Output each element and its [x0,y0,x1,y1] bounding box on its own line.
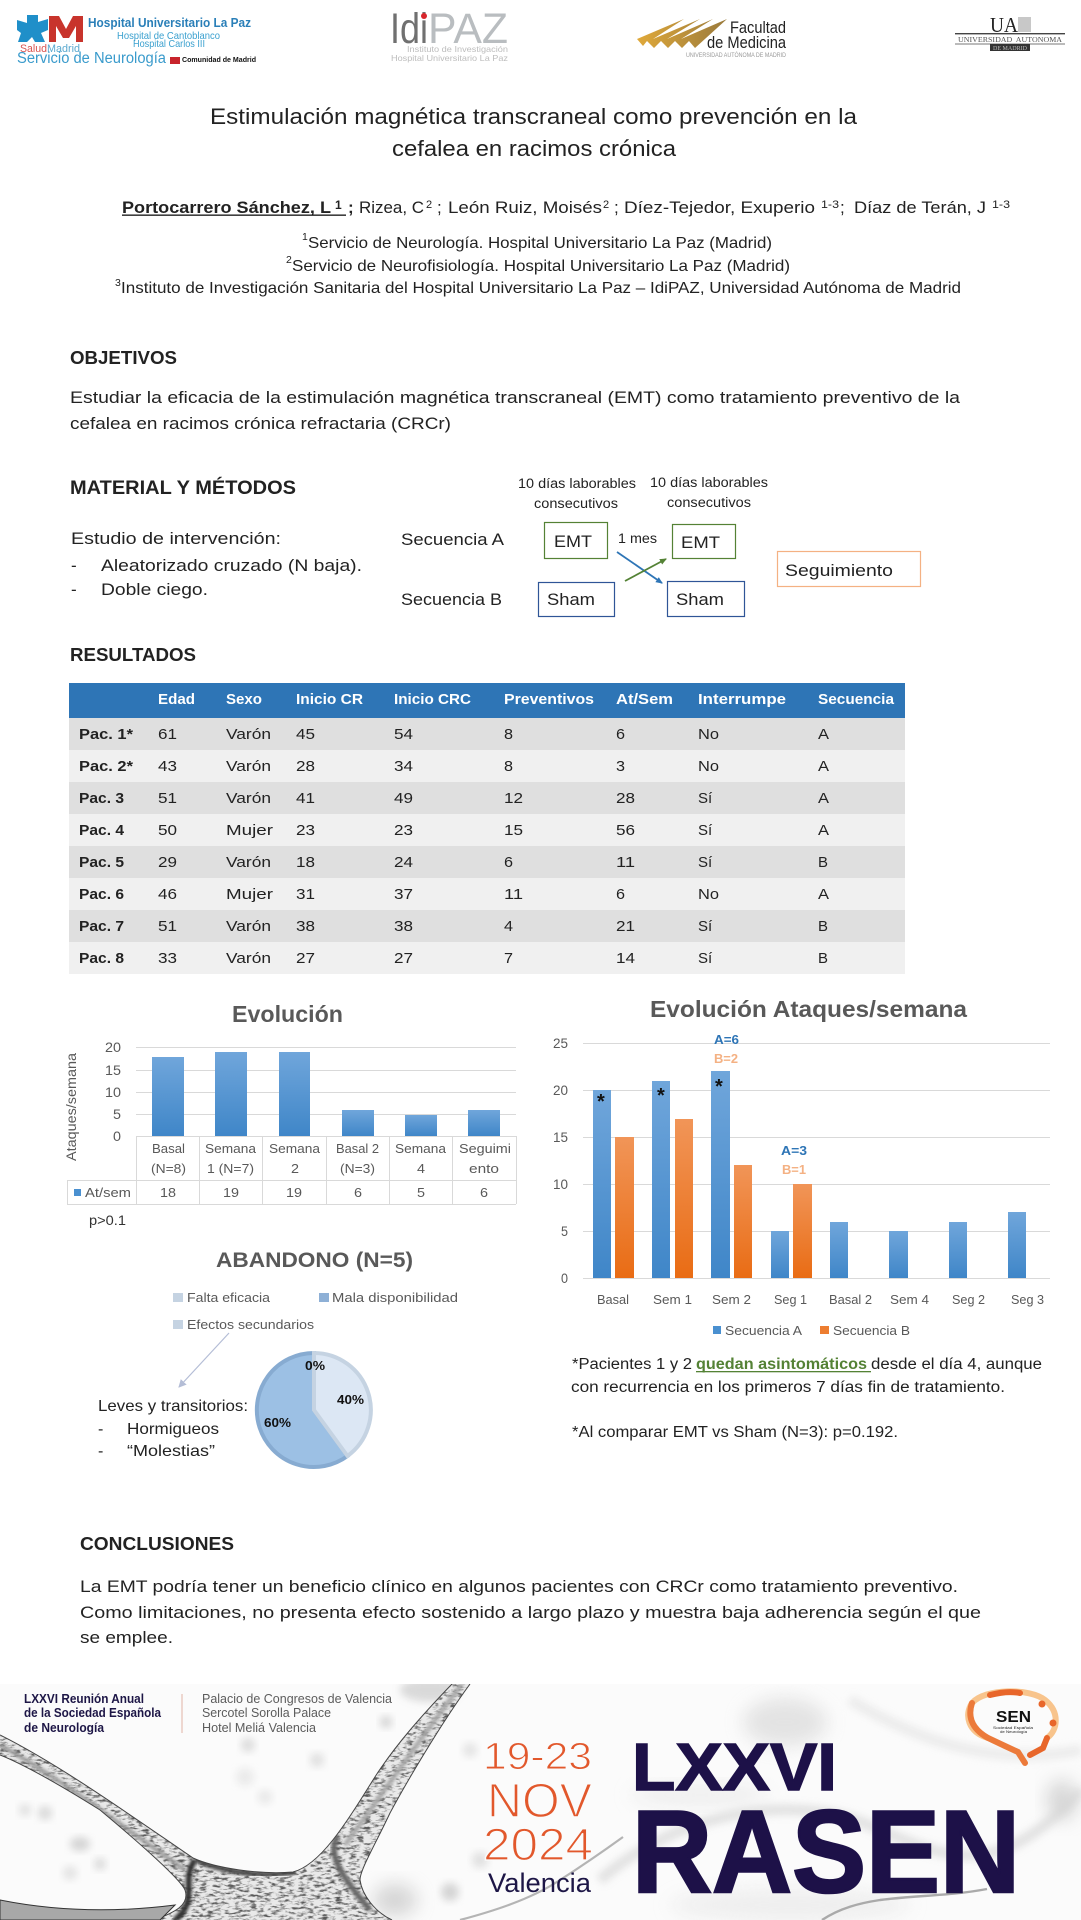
label: 10 días laborables primera fase [518,476,636,511]
logo: Universidad Autónoma de Madrid: DE MADRID [993,46,1028,52]
authors: 2 [426,199,432,211]
logo: Facultad de Medicina: Facultad [730,18,786,37]
text: comparación EMT vs Sham: *Al comparar EMT vs Sham (N=3): p=0.192. [572,1424,898,1441]
legend [173,1291,458,1332]
logo: Hospital Universitario La Paz: Hospital de Cantoblanco [117,30,220,42]
y axis labels [553,1035,568,1286]
icon: gold stripes [637,19,727,48]
row: Pac. 2: No [698,758,719,775]
bars: secuencia B [615,1119,812,1278]
box: EMT fase 2: EMT [681,533,720,552]
table: pacientes [69,683,905,974]
data table: ento [469,1162,499,1176]
logo: Universidad Autónoma de Madrid: UNIVERSIDAD AUTONOMA [958,35,1063,44]
legend: Secuencia A [725,1323,802,1338]
logo: IdiPAZ: PAZ [428,5,508,53]
row: Pac. 3: 51 [158,790,177,807]
affiliations: 1 [302,231,308,243]
box: EMT fase 1 [544,522,608,558]
data table: 6 [354,1186,362,1200]
logo: SEN: de Neurología [1000,1729,1028,1734]
row: Pac. 3: 28 [616,790,635,807]
icon: red M [49,16,83,42]
y axis labels: 10 [105,1084,121,1100]
arrow: blue crossover [617,552,662,583]
icon: SaludMadrid cross [17,15,48,42]
x axis labels: Seg 1 [774,1292,807,1307]
row: Pac. 3: 41 [296,790,315,807]
box: Sham fase 2: Sham [676,590,724,609]
row: Pac. 4: 56 [616,822,635,839]
row: Pac. 2: A [818,758,829,775]
row: Pac. 5: Pac. 5 [79,855,124,871]
affiliations: Servicio de Neurofisiología. Hospital Universitario La Paz (Madrid) [292,258,790,275]
table header: Secuencia [818,692,895,708]
asterisks on bars: * [597,1091,605,1113]
annotation: Sem 2 n: B=2 [714,1051,738,1066]
data table: At/sem [85,1186,131,1200]
chart title: Evolución Ataques/semana [650,996,967,1022]
row: Pac. 1: 54 [394,726,413,743]
arrow: green crossover [625,559,666,581]
row: Pac. 4: Mujer [226,822,273,839]
row: Pac. 6: A [818,886,829,903]
row: Pac. 8: B [818,950,828,967]
row: Pac. 4: Sí [698,822,713,839]
data table: 4 [417,1162,425,1176]
text: objetivos: cefalea en racimos crónica refractaria (CRCr) [70,414,451,433]
affiliations: 3 [115,277,121,289]
logo: Facultad de Medicina: de Medicina [707,33,786,52]
text: conclusiones: La EMT podría tener un beneficio clínico en algunos pacientes con CRCr como tratamiento preventivo. [80,1577,958,1596]
data table: Seguimi [459,1142,511,1156]
chart title: ABANDONO (N=5) [216,1249,413,1272]
row: Pac. 4: 23 [394,822,413,839]
label: 10 días laborables segunda fase [650,475,768,510]
axons [460,1837,987,1920]
affiliations: Servicio de Neurología. Hospital Universitario La Paz (Madrid) [308,235,772,252]
box: Sham fase 1: Sham [547,590,595,609]
y axis labels: 25 [553,1035,568,1051]
row: Pac. 5: 11 [616,854,635,871]
data table: 1 (N=7) [207,1162,254,1176]
row: Pac. 6: 46 [158,886,177,903]
row: Pac. 5: Varón [226,854,271,871]
text: nota pacientes asintomáticos: desde el día 4, aunque [871,1356,1042,1373]
row: Pac. 5 [69,846,905,878]
row: Pac. 7: 4 [504,918,513,935]
logo: SEN: SEN [996,1709,1031,1726]
legend: Secuencia B [833,1323,910,1338]
row: Pac. 2: Pac. 2* [79,759,133,775]
text: estudio de intervención: Doble ciego. [101,580,208,599]
annotation: Sem 2 n [714,1032,739,1066]
dates: NOV [487,1775,592,1828]
text: estudio de intervención: - [71,556,77,575]
row: Pac. 1: 45 [296,726,315,743]
pie labels: 40% [337,1392,364,1407]
authors: ; [348,198,354,217]
heading: objetivos: OBJETIVOS [70,348,177,368]
row: Pac. 3: Varón [226,790,271,807]
authors: Díaz de Terán, J [854,198,986,217]
meeting name: de Neurología [24,1721,105,1735]
asterisks on bars [597,1076,723,1113]
row: Pac. 7: 21 [616,918,635,935]
authors: 2 [603,199,609,211]
text: leves y transitorios: Leves y transitorios: [98,1398,248,1415]
dates: 2024 [483,1819,593,1870]
y axis labels: 15 [553,1129,568,1145]
legend: Efectos secundarios [187,1318,314,1332]
text: nota pacientes asintomáticos: con recurrencia en los primeros 7 días fin de tratamiento. [571,1379,1005,1396]
row: Pac. 1: Varón [226,726,271,743]
text: leves y transitorios: “Molestias” [127,1443,215,1460]
meeting name [24,1692,162,1735]
row: Pac. 4: 50 [158,822,177,839]
logo: IdiPAZ: Hospital Universitario La Paz [391,53,508,63]
box: seguimiento [778,552,920,586]
row: Pac. 3: A [818,790,829,807]
logo: Hospital Universitario La Paz: Madrid [47,43,80,55]
row: Pac. 1: A [818,726,829,743]
row: Pac. 1: No [698,726,719,743]
pie slices [257,1353,371,1467]
data table: 2 [291,1162,299,1176]
row: Pac. 7: 51 [158,918,177,935]
text: leves y transitorios: - [98,1421,103,1438]
x axis labels: Sem 4 [890,1292,929,1307]
meeting name: de la Sociedad Española [24,1706,162,1720]
row: Pac. 8: Pac. 8 [79,951,124,967]
authors: 1 [335,198,342,212]
data table: 19 [223,1186,239,1200]
row: Pac. 5: 18 [296,854,315,871]
title: cefalea en racimos crónica [392,136,677,161]
y axis labels: 15 [105,1062,121,1078]
pie labels: 0% [305,1358,325,1373]
row: Pac. 5: B [818,854,828,871]
row: Pac. 6: No [698,886,719,903]
label: 10 días laborables primera fase: 10 días laborables [518,476,636,491]
logo: Hospital Universitario La Paz [17,15,256,67]
table header: Edad [158,692,195,708]
text: conclusiones: se emplee. [80,1628,173,1647]
banner: LXXVI RASEN [0,1678,1081,1920]
asterisks on bars: * [657,1085,665,1107]
data table: Semana [269,1142,320,1156]
dates: 19-23 [483,1736,592,1778]
title: Estimulación magnética transcraneal como prevención en la [210,104,858,129]
text: estudio de intervención [71,529,362,599]
text: estudio de intervención: - [71,580,77,599]
logo: IdiPAZ [390,5,508,63]
table header: Sexo [226,692,262,708]
row: Pac. 6: 31 [296,886,315,903]
affiliations: 2 [286,254,292,266]
diagram: crossover design [401,475,920,616]
row: Pac. 4: A [818,822,829,839]
row: Pac. 2: 28 [296,758,315,775]
logo: Facultad de Medicina: UNIVERSIDAD AUTÓNOMA DE MADRID [686,50,786,59]
text: nota pacientes asintomáticos [571,1356,1042,1396]
text: leves y transitorios: Hormigueos [127,1421,219,1438]
authors: León Ruiz, Moisés [448,198,602,217]
row: Pac. 1: 6 [616,726,625,743]
row: Pac. 2: 34 [394,758,413,775]
chart title: Evolución [232,1001,343,1027]
annotation: Seg 1 n: A=3 [781,1143,807,1158]
table header: Inicio CRC [394,692,472,708]
logo: SEN: Sociedad Española [993,1725,1034,1730]
row: Pac. 3: 12 [504,790,523,807]
row: Pac. 5: 24 [394,854,413,871]
y axis labels: 20 [553,1082,568,1098]
row: Pac. 6: 37 [394,886,413,903]
row: Pac. 8: Varón [226,950,271,967]
annotation: Sem 2 n: A=6 [714,1032,739,1047]
row: Pac. 8: 27 [296,950,315,967]
y axis labels: 5 [113,1106,121,1122]
text: leves y transitorios [98,1398,248,1460]
logo: SEN [968,1691,1056,1763]
text: estudio de intervención: Estudio de intervención: [71,529,281,548]
pie labels: 60% [264,1415,291,1430]
row: Pac. 7: B [818,918,828,935]
row: Pac. 6: Mujer [226,886,273,903]
y axis labels [105,1039,121,1144]
logo: Universidad Autónoma de Madrid: UA [990,13,1019,37]
text: leves y transitorios: - [98,1443,103,1460]
row: Pac. 2 [69,750,905,782]
data table: (N=3) [340,1162,375,1176]
data table: Basal 2 [336,1142,379,1156]
annotation: Seg 1 n [781,1143,807,1177]
label: 10 días laborables segunda fase: consecutivos [667,495,751,510]
x axis labels: Sem 2 [712,1292,751,1307]
venues [202,1694,392,1732]
legend: Falta eficacia [187,1291,270,1305]
meeting name: LXXVI Reunión Anual [24,1692,144,1706]
row: Pac. 3: Sí [698,790,713,807]
authors: ; [840,198,845,217]
logo: Universidad Autónoma de Madrid [955,13,1065,52]
row: Pac. 2: 3 [616,758,625,775]
data table: 5 [417,1186,425,1200]
row: Pac. 6: Pac. 6 [79,887,124,903]
row: Pac. 2: 43 [158,758,177,775]
row: Pac. 1 [69,718,905,750]
text: nota pacientes asintomáticos: *Pacientes 1 y 2 [572,1356,692,1373]
row: Pac. 6: 11 [504,886,523,903]
venues: Palacio de Congresos de Valencia [202,1692,392,1706]
data table: 6 [480,1186,488,1200]
row: Pac. 3 [69,782,905,814]
text: estudio de intervención: Aleatorizado cruzado (N baja). [101,556,362,575]
text: objetivos: Estudiar la eficacia de la estimulación magnética transcraneal (EMT) como tratamiento preventivo de la [70,388,961,407]
bars: secuencia A [593,1071,1026,1278]
neuron body and dendrites [0,1684,480,1920]
box: EMT fase 1: EMT [554,532,592,551]
y axis labels: 0 [561,1270,568,1286]
row: Pac. 2: Varón [226,758,271,775]
row: Pac. 1: 8 [504,726,513,743]
box: Sham fase 2 [668,582,744,616]
heading: conclusiones: CONCLUSIONES [80,1533,234,1554]
authors: 1-3 [821,199,839,211]
authors [122,198,1010,217]
data table: 18 [160,1186,176,1200]
note: p>0.1: p>0.1 [89,1213,126,1228]
dates [484,1743,591,1892]
logo: IdiPAZ: Instituto de Investigación [407,44,508,54]
box: EMT fase 2 [672,524,736,558]
asterisks on bars: * [715,1076,723,1098]
box: seguimiento: Seguimiento [785,561,893,580]
bars [152,1052,500,1136]
row: Pac. 7 [69,910,905,942]
row: Pac. 4: 15 [504,822,523,839]
logo: Hospital Universitario La Paz: Hospital Universitario La Paz [88,15,251,30]
row: Pac. 8: Sí [698,950,713,967]
authors: Portocarrero Sánchez, L [122,198,331,217]
venues: Hotel Meliá Valencia [202,1721,316,1735]
authors: Rizea, C [359,198,424,217]
title [210,104,858,161]
row: Pac. 1: 61 [158,726,177,743]
arrow: efectos secundarios to note [179,1333,229,1387]
logo: Hospital Universitario La Paz: Servicio de Neurología [17,50,166,67]
annotation: Seg 1 n: B=1 [782,1162,806,1177]
x axis labels: Basal [597,1292,629,1307]
label: 10 días laborables primera fase: consecutivos [534,496,618,511]
row: Pac. 7: Sí [698,918,713,935]
row: Pac. 8: 7 [504,950,513,967]
affiliations [115,231,961,297]
x axis labels: Sem 1 [653,1292,692,1307]
bar chart: Evolución [64,1001,516,1204]
row: Pac. 5: 6 [504,854,513,871]
table header: At/Sem [616,692,673,708]
row: Pac. 8: 33 [158,950,177,967]
row: Pac. 7: 38 [394,918,413,935]
logo: Hospital Universitario La Paz: Hospital Carlos III [133,38,205,50]
x axis labels: Seg 2 [952,1292,985,1307]
row: Pac. 7: Varón [226,918,271,935]
box: Sham fase 1 [538,582,614,616]
row: Pac. 5: 29 [158,854,177,871]
text: objetivos [70,388,961,433]
authors: 1-3 [992,199,1010,211]
row: Pac. 6: 6 [616,886,625,903]
heading: material y métodos: MATERIAL Y MÉTODOS [70,477,296,499]
row: Pac. 8: 27 [394,950,413,967]
text: conclusiones: Como limitaciones, no presenta efecto sostenido a largo plazo y muestra baja adherencia según el que [80,1603,981,1622]
data table: (N=8) [151,1162,186,1176]
venues: Sercotel Sorolla Palace [202,1706,331,1720]
row: Pac. 4 [69,814,905,846]
label: 1 mes: 1 mes [618,531,657,546]
row: Pac. 3: Pac. 3 [79,791,124,807]
y axis title: Ataques/semana [64,1052,79,1161]
table header: Preventivos [504,692,594,708]
row: Pac. 1: Pac. 1* [79,727,133,743]
heading: resultados: RESULTADOS [70,645,196,665]
pie chart: Abandono [173,1249,458,1467]
row: Pac. 6 [69,878,905,910]
logo: IdiPAZ: Idi [390,5,428,53]
pie labels [264,1358,364,1430]
data table [67,1136,516,1204]
authors: ; [614,198,619,217]
row: Pac. 3: 49 [394,790,413,807]
heading: RASEN: RASEN [632,1786,1020,1917]
row: Pac. 8: 14 [616,950,635,967]
data table: 19 [286,1186,302,1200]
logo: Hospital Universitario La Paz: Salud [20,43,47,55]
authors: Díez-Tejedor, Exuperio [624,198,815,217]
label: secuencia A: Secuencia A [401,530,505,549]
x axis labels [597,1292,1044,1307]
row: Pac. 5: Sí [698,854,713,871]
y axis labels: 0 [113,1128,121,1144]
row: Pac. 7: 38 [296,918,315,935]
table header [69,683,905,718]
x axis labels: Basal 2 [829,1292,872,1307]
dates: Valencia [488,1868,592,1898]
y axis labels: 20 [105,1039,121,1055]
y axis labels: 5 [561,1223,568,1239]
x axis labels: Seg 3 [1011,1292,1044,1307]
row: Pac. 7: Pac. 7 [79,919,124,935]
heading: LXXVI: LXXVI [632,1730,837,1805]
affiliations: Instituto de Investigación Sanitaria del Hospital Universitario La Paz – IdiPAZ, Universidad Autónoma de Madrid [121,280,961,297]
data table: Semana [205,1142,256,1156]
table header: Inicio CR [296,692,364,708]
text: conclusiones [80,1577,981,1647]
text: nota pacientes asintomáticos: quedan asintomáticos [696,1356,867,1373]
label: 10 días laborables segunda fase: 10 días laborables [650,475,768,490]
row: Pac. 4: Pac. 4 [79,823,124,839]
table header: Interrumpe [698,692,786,708]
legend [713,1323,910,1338]
authors: ; [437,198,442,217]
logo: Hospital Universitario La Paz: Comunidad de Madrid [182,57,256,64]
row: Pac. 8 [69,942,905,974]
data table: Semana [395,1142,446,1156]
row: Pac. 4: 23 [296,822,315,839]
logo: Facultad de Medicina [637,18,786,59]
data table: Basal [152,1142,185,1156]
y axis labels: 10 [553,1176,568,1192]
label: secuencia B: Secuencia B [401,590,502,609]
blurred background neurons [19,1678,1081,1920]
bar chart: Evolución Ataques/semana [553,996,1050,1338]
row: Pac. 2: 8 [504,758,513,775]
legend: Mala disponibilidad [332,1291,458,1305]
